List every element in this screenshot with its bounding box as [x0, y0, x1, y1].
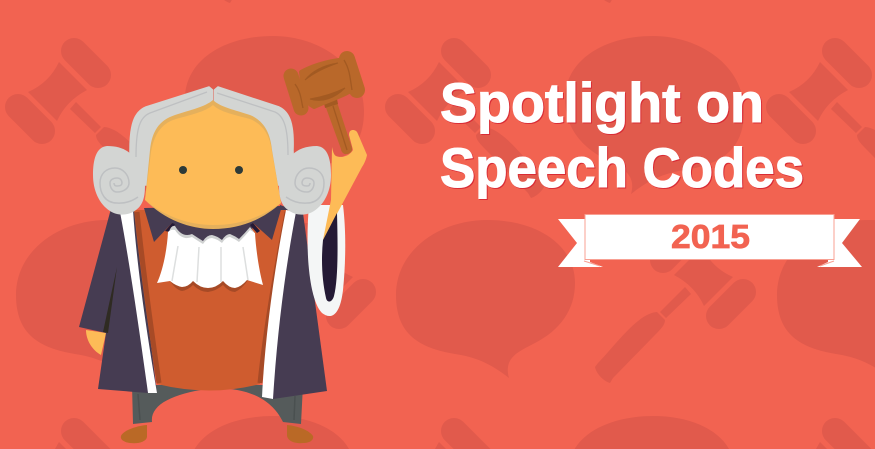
icon: powdered wig	[130, 87, 294, 185]
icon: raised arm and hand	[323, 130, 367, 240]
icon: raised sleeve trim	[308, 205, 345, 316]
title	[440, 71, 804, 199]
icon: wooden gavel	[291, 59, 357, 154]
icon: robe right side	[262, 205, 327, 399]
judge character	[79, 59, 367, 443]
icon: ribbon right tail	[817, 219, 862, 267]
year ribbon banner	[558, 214, 862, 267]
icon: robe left side	[79, 205, 157, 393]
ribbon body	[585, 214, 834, 260]
icon: lace jabot	[157, 226, 263, 292]
icon: left hand	[86, 330, 106, 355]
title: Spotlight on	[440, 71, 764, 134]
icon: dark sleeve interior	[322, 213, 338, 302]
icon: judge shoes	[121, 425, 313, 443]
icon: orange vest	[134, 210, 290, 390]
icon: eyes	[179, 166, 243, 174]
title: Speech Codes	[440, 136, 804, 199]
icon: ribbon left tail	[558, 219, 603, 267]
icon: face	[145, 100, 281, 229]
icon: judge trousers	[132, 385, 303, 424]
year label: 2015	[671, 218, 750, 255]
icon: robe collar	[144, 206, 282, 248]
icon: white robe trim	[120, 210, 296, 399]
icon: left wig curl	[93, 146, 145, 215]
icon: right wig curl	[279, 146, 331, 215]
